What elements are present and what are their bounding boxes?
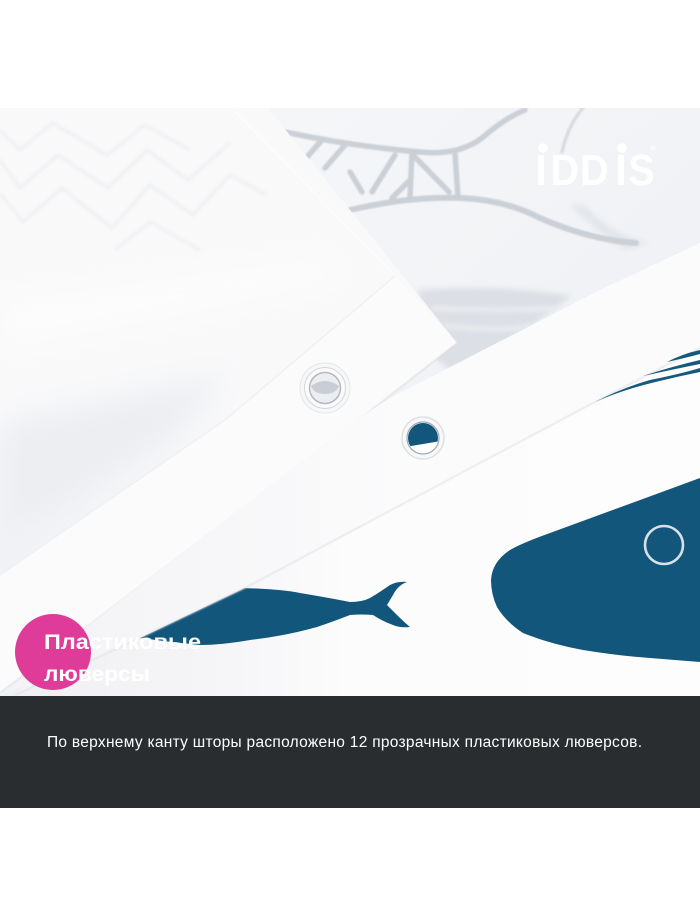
flap bottom hem corner xyxy=(0,505,216,648)
flap top hem xyxy=(232,108,395,276)
heading: люверсы xyxy=(44,663,150,686)
panel: upper hem band xyxy=(84,243,700,638)
hem fold line xyxy=(15,348,700,695)
callout: pink circle xyxy=(15,614,91,690)
logo: iddis: ® xyxy=(650,144,656,153)
shadow folds on background curtain xyxy=(418,205,650,378)
panel: dark caption band xyxy=(0,696,700,808)
panel: printed lower curtain xyxy=(260,348,700,696)
printed branch pattern xyxy=(285,108,636,243)
heading: Пластиковые xyxy=(44,631,201,654)
hem stitching xyxy=(0,276,395,575)
product photo xyxy=(0,108,700,696)
soft shadow on flap xyxy=(8,390,196,502)
icon: large fish eye xyxy=(645,526,683,564)
icon: clear grommet lower xyxy=(402,417,444,459)
icon: fish stripes at right edge xyxy=(595,350,700,402)
caption text: По верхнему канту шторы расположено 12 прозрачных пластиковых люверсов. xyxy=(47,734,642,751)
light print bands behind hem xyxy=(432,308,555,329)
infographic canvas xyxy=(0,108,700,808)
icon: large fish body xyxy=(491,478,700,662)
flap zigzag print xyxy=(0,123,267,250)
logo: iddis: IDDIS xyxy=(536,145,655,194)
icon: clear grommet upper xyxy=(300,363,350,413)
icon: small whale xyxy=(140,582,410,645)
panel: folded translucent curtain flap xyxy=(282,128,456,357)
panel: curtain background xyxy=(0,108,700,696)
